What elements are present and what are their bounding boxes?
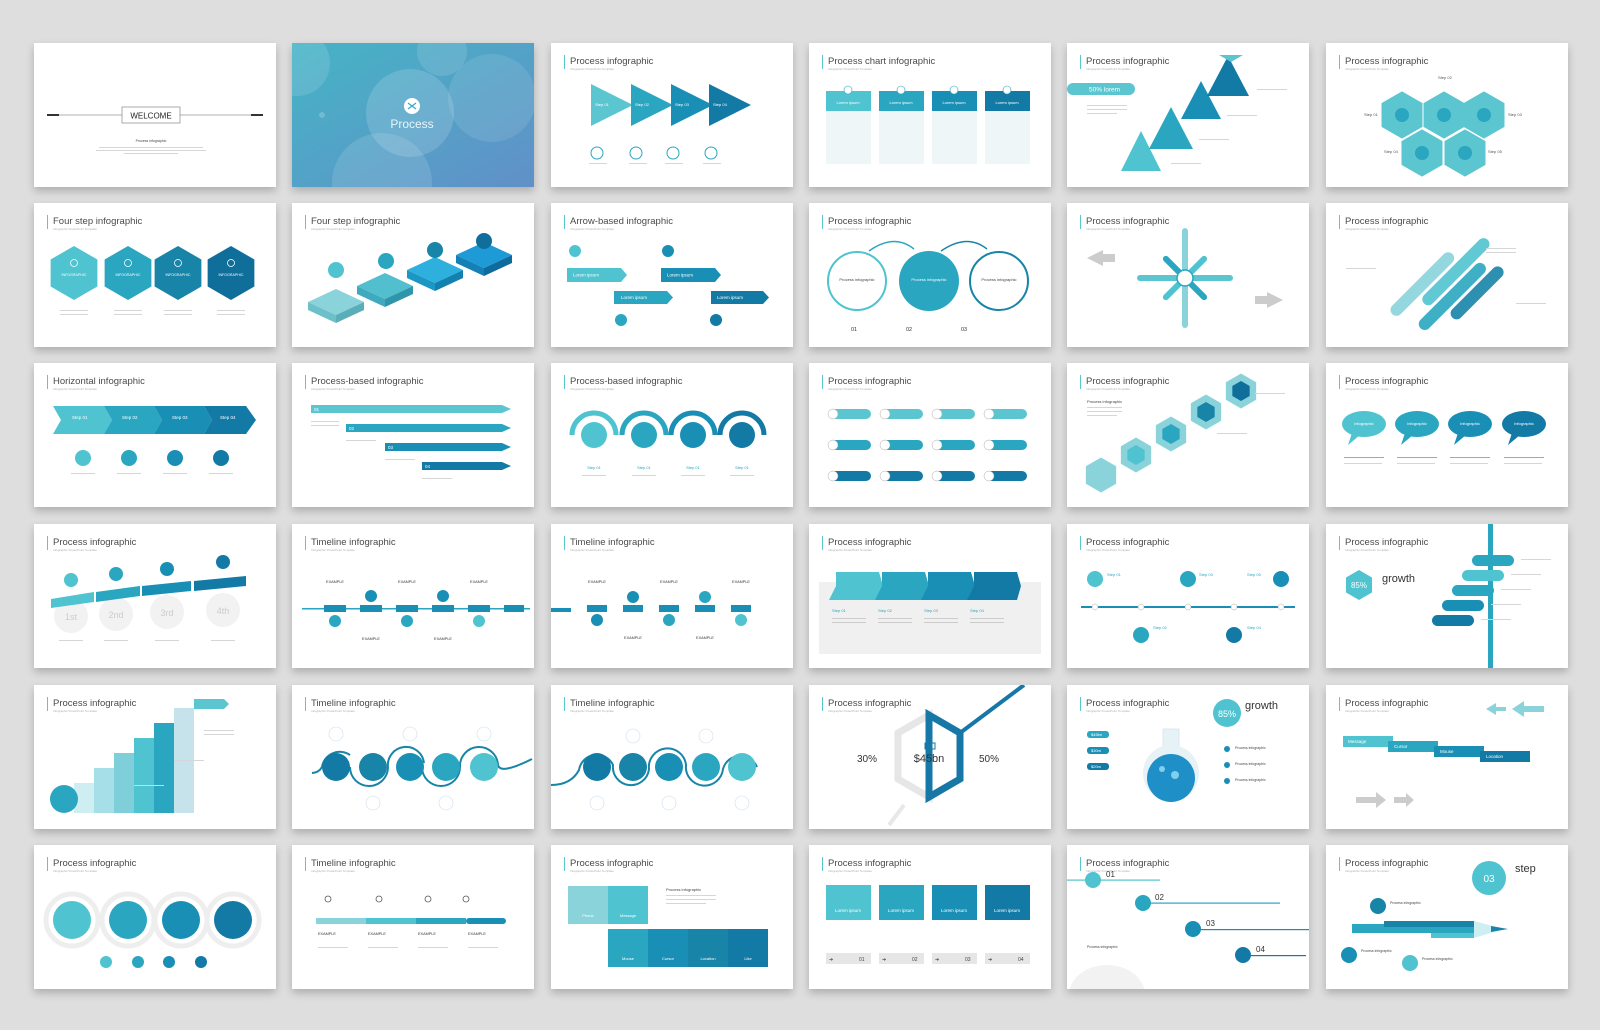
panel: steps 01-04: Process infographic	[1087, 945, 1118, 949]
panel: hexagon $45bn: 30%	[857, 754, 877, 765]
panel: stairs: Process infographic	[53, 698, 137, 709]
panel: process cross: Infographic PowerPoint Template	[1086, 227, 1130, 231]
panel: four step hexagons: Four step infographic	[53, 216, 142, 227]
panel: lorem boxes: ➜	[829, 957, 833, 963]
panel: speech bubbles: Infographic	[1460, 421, 1480, 426]
panel: speech bubbles: Infographic	[1514, 421, 1534, 426]
panel: puzzle squares: Phone	[582, 913, 595, 918]
panel: pencil step: Process infographic	[1390, 901, 1421, 905]
panel: growth 85%: 85%	[1351, 581, 1367, 590]
panel: process-based arcs: Step 01	[686, 465, 701, 470]
panel: four step isometric: Infographic PowerPoint Template	[311, 227, 355, 231]
triangles	[1121, 55, 1249, 171]
panel: timeline bar: Timeline infographic	[311, 858, 396, 869]
panel: process circles: 01	[851, 327, 857, 333]
panel: process cross: Process infographic	[1086, 216, 1170, 227]
panel: process triangles: Process infographic	[1086, 56, 1170, 67]
panel: four step isometric	[292, 203, 534, 347]
panel: process-based arrows: 04	[425, 464, 431, 469]
panel: process 3d tabs: Step 02	[878, 608, 893, 613]
panel: process ramp	[34, 524, 276, 668]
panel: process ramp: Process infographic	[53, 537, 137, 548]
panel: arrows message: Process infographic	[1345, 698, 1429, 709]
panel: process hexagons: Step 02	[1438, 75, 1453, 80]
panel: process chart	[809, 43, 1051, 187]
panel: puzzle squares	[551, 845, 793, 989]
panel: speech bubbles	[1326, 363, 1568, 507]
panel: process circles: Process infographic	[828, 216, 912, 227]
panel: arrows message: Message	[1348, 739, 1367, 744]
panel: process-based arcs: Process-based infographic	[570, 376, 683, 387]
panel: timeline 1: Timeline infographic	[311, 537, 396, 548]
panel: circle rings	[34, 845, 276, 989]
panel: timeline bar: EXAMPLE	[418, 932, 436, 936]
panel: horizontal infographic: Step 03	[172, 415, 188, 420]
panel: process ramp: 3rd	[160, 608, 174, 618]
panel: horizontal infographic	[34, 363, 276, 507]
panel: flask growth: Infographic PowerPoint Template	[1086, 709, 1130, 713]
panel: speech bubbles: Process infographic	[1345, 376, 1429, 387]
panel: lorem boxes: ➜	[882, 957, 886, 963]
panel: process chart: Process chart infographic	[828, 56, 935, 67]
panel: timeline 1: EXAMPLE	[326, 580, 344, 584]
panel: four step hexagons: INFOGRAPHIC	[62, 273, 87, 277]
panel: process pins: Process infographic	[1086, 537, 1170, 548]
panel: timeline 2	[551, 524, 793, 668]
panel: process diagonal bars: Process infographic	[1345, 216, 1429, 227]
panel: process 3d tabs: Step 03	[924, 608, 939, 613]
panel: puzzle squares: Cursor	[662, 956, 675, 961]
panel: timeline bar: Infographic PowerPoint Template	[311, 869, 355, 873]
arrow chevrons: Step 02	[635, 102, 650, 107]
panel: steps 01-04: 01	[1106, 870, 1115, 879]
panel: flask growth: $45bn	[1091, 732, 1102, 737]
panel: timeline circles 1: Infographic PowerPoint Template	[311, 709, 355, 713]
panel: timeline circles 1: Timeline infographic	[311, 698, 396, 709]
panel: flask growth: 85%	[1218, 709, 1236, 719]
panel: process cover slide	[292, 43, 534, 187]
panel: lorem boxes: Lorem ipsum	[994, 908, 1020, 913]
pill 50% lorem: 50% lorem	[1089, 86, 1120, 94]
panel: timeline 2: Infographic PowerPoint Template	[570, 548, 614, 552]
panel: puzzle squares: Process infographic	[666, 887, 701, 892]
panel: process cross	[1067, 203, 1309, 347]
panel: timeline circles 2: Infographic PowerPoint Template	[570, 709, 614, 713]
panel: process hexagons: Step 03	[1508, 112, 1523, 117]
column headers	[826, 86, 1030, 111]
panel: process arrows	[551, 43, 793, 187]
panel: growth 85%	[1326, 524, 1568, 668]
panel: process chart: Infographic PowerPoint Template	[828, 67, 872, 71]
panel: process arrows: Infographic PowerPoint Template	[570, 67, 614, 71]
panel: horizontal infographic: Step 01	[72, 415, 88, 420]
panel: growth 85%: Infographic PowerPoint Template	[1345, 548, 1389, 552]
arrow chevrons	[591, 84, 751, 126]
panel: process hex chain	[1067, 363, 1309, 507]
panel: process pills	[809, 363, 1051, 507]
panel: growth 85%: growth	[1382, 573, 1415, 585]
panel: process hexagons	[1326, 43, 1568, 187]
panel: puzzle squares: Process infographic	[570, 858, 654, 869]
panel: flask growth: Process infographic	[1235, 778, 1266, 782]
column headers: Lorem ipsum	[995, 100, 1019, 105]
panel: hexagon $45bn: $45bn	[914, 753, 944, 765]
panel: lorem boxes: 01	[859, 957, 865, 963]
panel: flask growth: Process infographic	[1235, 762, 1266, 766]
panel: lorem boxes: Lorem ipsum	[835, 908, 861, 913]
panel: pencil step: Process infographic	[1422, 957, 1453, 961]
panel: process circles: Process infographic	[981, 277, 1017, 282]
panel: timeline circles 2	[551, 685, 793, 829]
panel: circle rings: Process infographic	[53, 858, 137, 869]
panel: flask growth	[1067, 685, 1309, 829]
panel: process hexagons: Infographic PowerPoint Template	[1345, 67, 1389, 71]
panel: puzzle squares: Location	[700, 956, 716, 961]
panel: four step hexagons: INFOGRAPHIC	[166, 273, 191, 277]
panel: process-based arcs: Step 01	[587, 465, 602, 470]
panel: process circles: Process infographic	[911, 277, 947, 282]
welcome label: WELCOME	[130, 112, 172, 120]
panel: process circles: 03	[961, 327, 967, 333]
panel: process hexagons: Step 04	[1384, 149, 1399, 154]
panel: timeline 1: EXAMPLE	[362, 637, 380, 641]
panel: process ramp: 2nd	[108, 610, 124, 620]
panel: timeline bar: EXAMPLE	[318, 932, 336, 936]
panel: process-based arrows	[292, 363, 534, 507]
panel: lorem boxes: 02	[912, 957, 918, 963]
arrow chevrons: Step 04	[713, 102, 728, 107]
panel: process pins: Infographic PowerPoint Template	[1086, 548, 1130, 552]
panel: steps 01-04: Infographic PowerPoint Template	[1086, 869, 1130, 873]
panel: lorem boxes: ➜	[988, 957, 992, 963]
panel: flask growth: $30m	[1091, 748, 1102, 753]
panel: steps 01-04: 02	[1155, 893, 1164, 902]
panel: process circles: Infographic PowerPoint Template	[828, 227, 872, 231]
panel: process circles	[809, 203, 1051, 347]
panel: lorem boxes: Lorem ipsum	[941, 908, 967, 913]
panel: process 3d tabs	[809, 524, 1051, 668]
panel: process pins	[1067, 524, 1309, 668]
panel: process-based arrows: 02	[349, 426, 355, 431]
panel: speech bubbles: Infographic	[1407, 421, 1427, 426]
panel: timeline bar: EXAMPLE	[368, 932, 386, 936]
panel: horizontal infographic: Step 02	[122, 415, 138, 420]
panel: arrows message: Location	[1486, 754, 1504, 759]
panel: timeline 1	[292, 524, 534, 668]
panel: process 3d tabs: Step 01	[832, 608, 847, 613]
panel: process pins: Step 03	[1199, 572, 1214, 577]
panel: timeline bar: EXAMPLE	[468, 932, 486, 936]
panel: steps 01-04: Process infographic	[1086, 858, 1170, 869]
panel: four step hexagons: INFOGRAPHIC	[219, 273, 244, 277]
panel: pencil step: 03	[1483, 874, 1495, 885]
panel: arrows message: Infographic PowerPoint Template	[1345, 709, 1389, 713]
panel: process hex chain: Process infographic	[1086, 376, 1170, 387]
panel: four step hexagons: INFOGRAPHIC	[116, 273, 141, 277]
panel: process hex chain: Process infographic	[1087, 399, 1122, 404]
panel: puzzle squares: Message	[620, 913, 637, 918]
panel: process hexagons: Process infographic	[1345, 56, 1429, 67]
panel: flask growth: Process infographic	[1235, 746, 1266, 750]
panel: process hex chain: Infographic PowerPoint Template	[1086, 387, 1130, 391]
panel: lorem boxes	[809, 845, 1051, 989]
arrow chevrons: Step 03	[675, 102, 690, 107]
panel: timeline circles 1	[292, 685, 534, 829]
panel: process triangles	[1067, 43, 1309, 187]
panel: process diagonal bars: Infographic PowerPoint Template	[1345, 227, 1389, 231]
panel: timeline 2: EXAMPLE	[624, 636, 642, 640]
pencil	[1352, 921, 1508, 938]
panel: horizontal infographic: Infographic PowerPoint Template	[53, 387, 97, 391]
panel: lorem boxes: Process infographic	[828, 858, 912, 869]
panel: lorem boxes: 04	[1018, 957, 1024, 963]
panel: timeline 1: EXAMPLE	[434, 637, 452, 641]
panel: steps 01-04	[1067, 845, 1309, 989]
panel: arrows message	[1326, 685, 1568, 829]
panel: flask growth: growth	[1245, 700, 1278, 712]
panel: process pins: Step 04	[1247, 625, 1262, 630]
panel: process circles: Process infographic	[839, 277, 875, 282]
panel: arrow-based: Infographic PowerPoint Template	[570, 227, 614, 231]
panel: process 3d tabs: Step 04	[970, 608, 985, 613]
column headers: Lorem ipsum	[836, 100, 860, 105]
icon: shuffle	[404, 98, 420, 114]
panel: four step hexagons	[34, 203, 276, 347]
panel: timeline 2: EXAMPLE	[732, 580, 750, 584]
panel: process-based arrows: Process-based infographic	[311, 376, 424, 387]
panel: hexagon $45bn	[809, 685, 1051, 829]
panel: process hexagons: Step 01	[1364, 112, 1379, 117]
panel: pencil step: Process infographic	[1361, 949, 1392, 953]
iso blocks	[308, 242, 512, 323]
panel: hexagon $45bn: 50%	[979, 754, 999, 765]
column headers: Lorem ipsum	[889, 100, 913, 105]
panel: timeline 2: EXAMPLE	[588, 580, 606, 584]
panel: lorem boxes: Infographic PowerPoint Template	[828, 869, 872, 873]
panel: steps 01-04: 04	[1256, 945, 1265, 954]
panel: horizontal infographic: Horizontal infographic	[53, 376, 145, 387]
panel: process-based arcs: Step 01	[735, 465, 750, 470]
panel: process-based arrows: 03	[388, 445, 394, 450]
panel: timeline 2: EXAMPLE	[660, 580, 678, 584]
panel: process-based arcs	[551, 363, 793, 507]
panel: process pills: Process infographic	[828, 376, 912, 387]
panel: stairs: Infographic PowerPoint Template	[53, 709, 97, 713]
panel: lorem boxes: ➜	[935, 957, 939, 963]
panel: process arrows: Process infographic	[570, 56, 654, 67]
icons row	[591, 147, 717, 159]
panel: puzzle squares: Infographic PowerPoint Template	[570, 869, 614, 873]
panel: pencil step: Process infographic	[1345, 858, 1429, 869]
panel: speech bubbles: Infographic	[1354, 421, 1374, 426]
panel: four step hexagons: Infographic PowerPoint Template	[53, 227, 97, 231]
panel: puzzle squares: Like	[744, 956, 752, 961]
panel: pencil step: Infographic PowerPoint Template	[1345, 869, 1389, 873]
panel: process pins: Step 02	[1153, 625, 1168, 630]
panel: circle rings: Infographic PowerPoint Template	[53, 869, 97, 873]
panel: stairs	[34, 685, 276, 829]
panel: process-based arcs: Step 01	[637, 465, 652, 470]
panel: four step isometric: Four step infographic	[311, 216, 400, 227]
panel: timeline 1: Infographic PowerPoint Template	[311, 548, 355, 552]
column headers: Lorem ipsum	[942, 100, 966, 105]
pill 50% lorem	[1067, 83, 1135, 95]
panel: process ramp: 1st	[65, 612, 77, 622]
panel: timeline 1: EXAMPLE	[398, 580, 416, 584]
panel: growth 85%: Process infographic	[1345, 537, 1429, 548]
panel: puzzle squares: Mouse	[622, 956, 635, 961]
arrow chevrons: Step 01	[595, 102, 610, 107]
panel: flask growth: Process infographic	[1086, 698, 1170, 709]
welcome label	[122, 107, 180, 123]
panel: process-based arcs: Infographic PowerPoint Template	[570, 387, 614, 391]
panel: timeline 1: EXAMPLE	[470, 580, 488, 584]
panel: timeline circles 2: Timeline infographic	[570, 698, 655, 709]
panel: lorem boxes: 03	[965, 957, 971, 963]
panel: arrow-based: Lorem ipsum	[717, 295, 743, 300]
panel: process-based arrows: Infographic PowerPoint Template	[311, 387, 355, 391]
panel: process pins: Step 01	[1107, 572, 1122, 577]
panel: process 3d tabs: Process infographic	[828, 537, 912, 548]
panel: process cover slide: Process	[390, 117, 434, 131]
panel: timeline bar	[292, 845, 534, 989]
panel: process pins: Step 05	[1247, 572, 1262, 577]
panel: process ramp: Infographic PowerPoint Template	[53, 548, 97, 552]
panel: process diagonal bars	[1326, 203, 1568, 347]
panel: arrows message: Cursor	[1394, 744, 1408, 749]
panel: flask growth: $20m	[1091, 764, 1102, 769]
panel: horizontal infographic: Step 04	[220, 415, 236, 420]
panel: pencil step	[1326, 845, 1568, 989]
panel: process-based arrows: 01	[314, 407, 320, 412]
panel: hexagon $45bn: Process infographic	[828, 698, 912, 709]
panel: process ramp: 4th	[217, 606, 229, 616]
panel: timeline 2: Timeline infographic	[570, 537, 655, 548]
panel: process 3d tabs: Infographic PowerPoint Template	[828, 548, 872, 552]
panel: arrows message: Mouse	[1440, 749, 1454, 754]
panel: process circles: 02	[906, 327, 912, 333]
panel: arrow-based: Arrow-based infographic	[570, 216, 673, 227]
panel: speech bubbles: Infographic PowerPoint Template	[1345, 387, 1389, 391]
panel: arrow-based: Lorem ipsum	[573, 272, 599, 278]
panel: process triangles: Infographic PowerPoint Template	[1086, 67, 1130, 71]
panel: lorem boxes: Lorem ipsum	[888, 908, 914, 913]
panel: process pills: Infographic PowerPoint Template	[828, 387, 872, 391]
panel: steps 01-04: 03	[1206, 919, 1215, 928]
panel: process hexagons: Step 05	[1488, 149, 1503, 154]
panel: arrow-based: Lorem ipsum	[667, 272, 693, 278]
panel: welcome slide: Process infographic	[136, 139, 167, 143]
panel: arrow-based	[551, 203, 793, 347]
panel: welcome slide	[34, 43, 276, 187]
panel: arrow-based: Lorem ipsum	[621, 295, 647, 300]
panel: hexagon $45bn: Infographic PowerPoint Template	[828, 709, 872, 713]
panel: pencil step: step	[1515, 863, 1536, 875]
panel: timeline 2: EXAMPLE	[696, 636, 714, 640]
